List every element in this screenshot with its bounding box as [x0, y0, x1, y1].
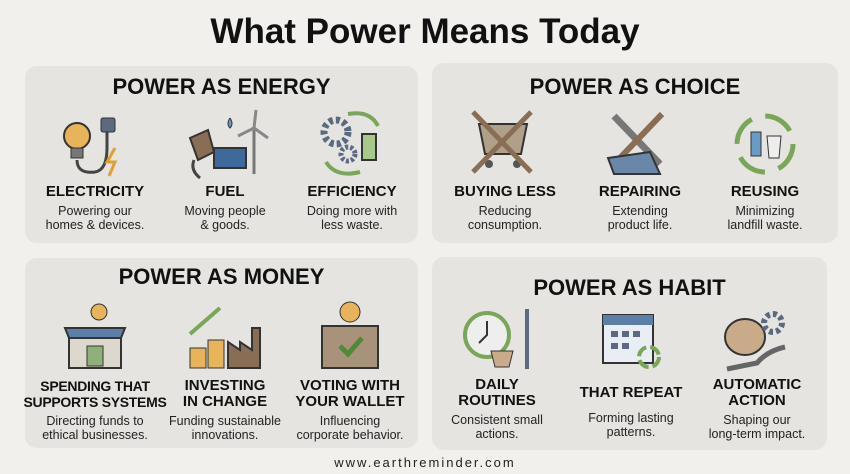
panel: power as choice [432, 63, 838, 243]
item: that repeat: Forming lasting [588, 411, 674, 425]
item: spending: SUPPORTS SYSTEMS [23, 394, 166, 410]
item: voting: YOUR WALLET [295, 393, 405, 410]
item: efficiency: less waste. [321, 218, 383, 232]
item: voting: corporate behavior. [296, 428, 404, 442]
item: voting: VOTING WITH [300, 377, 400, 394]
item: repairing [599, 112, 681, 232]
item: spending: ethical businesses. [42, 428, 148, 442]
item: repairing: REPAIRING [599, 183, 681, 200]
item: automatic action: long-term impact. [709, 427, 805, 441]
item: investing: Funding sustainable [169, 414, 281, 428]
footer url: www.earthreminder.com [334, 455, 516, 470]
item: that repeat: patterns. [607, 425, 655, 439]
item: electricity: homes & devices. [46, 218, 144, 232]
item: repairing: product life. [608, 218, 672, 232]
item: fuel: Moving people [184, 204, 266, 218]
item: spending: Directing funds to [46, 414, 144, 428]
item: fuel: FUEL [205, 183, 245, 200]
item: buying less: Reducing [479, 204, 531, 218]
heading: money: POWER AS MONEY [119, 264, 324, 289]
item: electricity [46, 118, 144, 232]
item: investing: IN CHANGE [183, 393, 267, 410]
item: that repeat: THAT REPEAT [580, 384, 682, 401]
item: investing: innovations. [192, 428, 258, 442]
item: reusing: Minimizing [735, 204, 795, 218]
heading: habit: POWER AS HABIT [533, 275, 726, 300]
item: voting [295, 302, 405, 442]
item: daily routines: Consistent small [451, 413, 543, 427]
item: daily routines: actions. [475, 427, 519, 441]
heading: choice: POWER AS CHOICE [530, 74, 740, 99]
item: buying less: BUYING LESS [454, 183, 556, 200]
item: efficiency [307, 111, 397, 232]
item: fuel: & goods. [200, 218, 250, 232]
item: reusing: REUSING [731, 183, 799, 200]
heading: energy: POWER AS ENERGY [112, 74, 330, 99]
item: that repeat [580, 314, 682, 439]
item: buying less: consumption. [468, 218, 542, 232]
item: automatic action: AUTOMATIC [713, 376, 801, 393]
item: electricity: Powering our [58, 204, 132, 218]
item: daily routines [451, 309, 543, 441]
item: automatic action: Shaping our [723, 413, 791, 427]
panel: power as energy [25, 66, 418, 243]
panel: power as habit [432, 257, 827, 450]
item: electricity: ELECTRICITY [46, 183, 144, 200]
item: repairing: Extending [612, 204, 668, 218]
item: automatic action [709, 311, 805, 441]
item: reusing: landfill waste. [727, 218, 803, 232]
item: efficiency: EFFICIENCY [307, 183, 397, 200]
item: reusing [727, 114, 803, 232]
item: spending: SPENDING THAT [40, 378, 150, 394]
title: What Power Means Today [210, 12, 640, 51]
item: fuel [184, 110, 269, 232]
item: investing [169, 306, 281, 442]
item: daily routines: ROUTINES [458, 392, 536, 409]
item: efficiency: Doing more with [307, 204, 397, 218]
item: investing: INVESTING [185, 377, 265, 394]
item: daily routines: DAILY [475, 376, 519, 393]
item: voting: Influencing [320, 414, 380, 428]
item: spending [23, 304, 166, 442]
panel: power as money [25, 258, 418, 448]
item: buying less [454, 110, 556, 232]
item: automatic action: ACTION [728, 392, 786, 409]
